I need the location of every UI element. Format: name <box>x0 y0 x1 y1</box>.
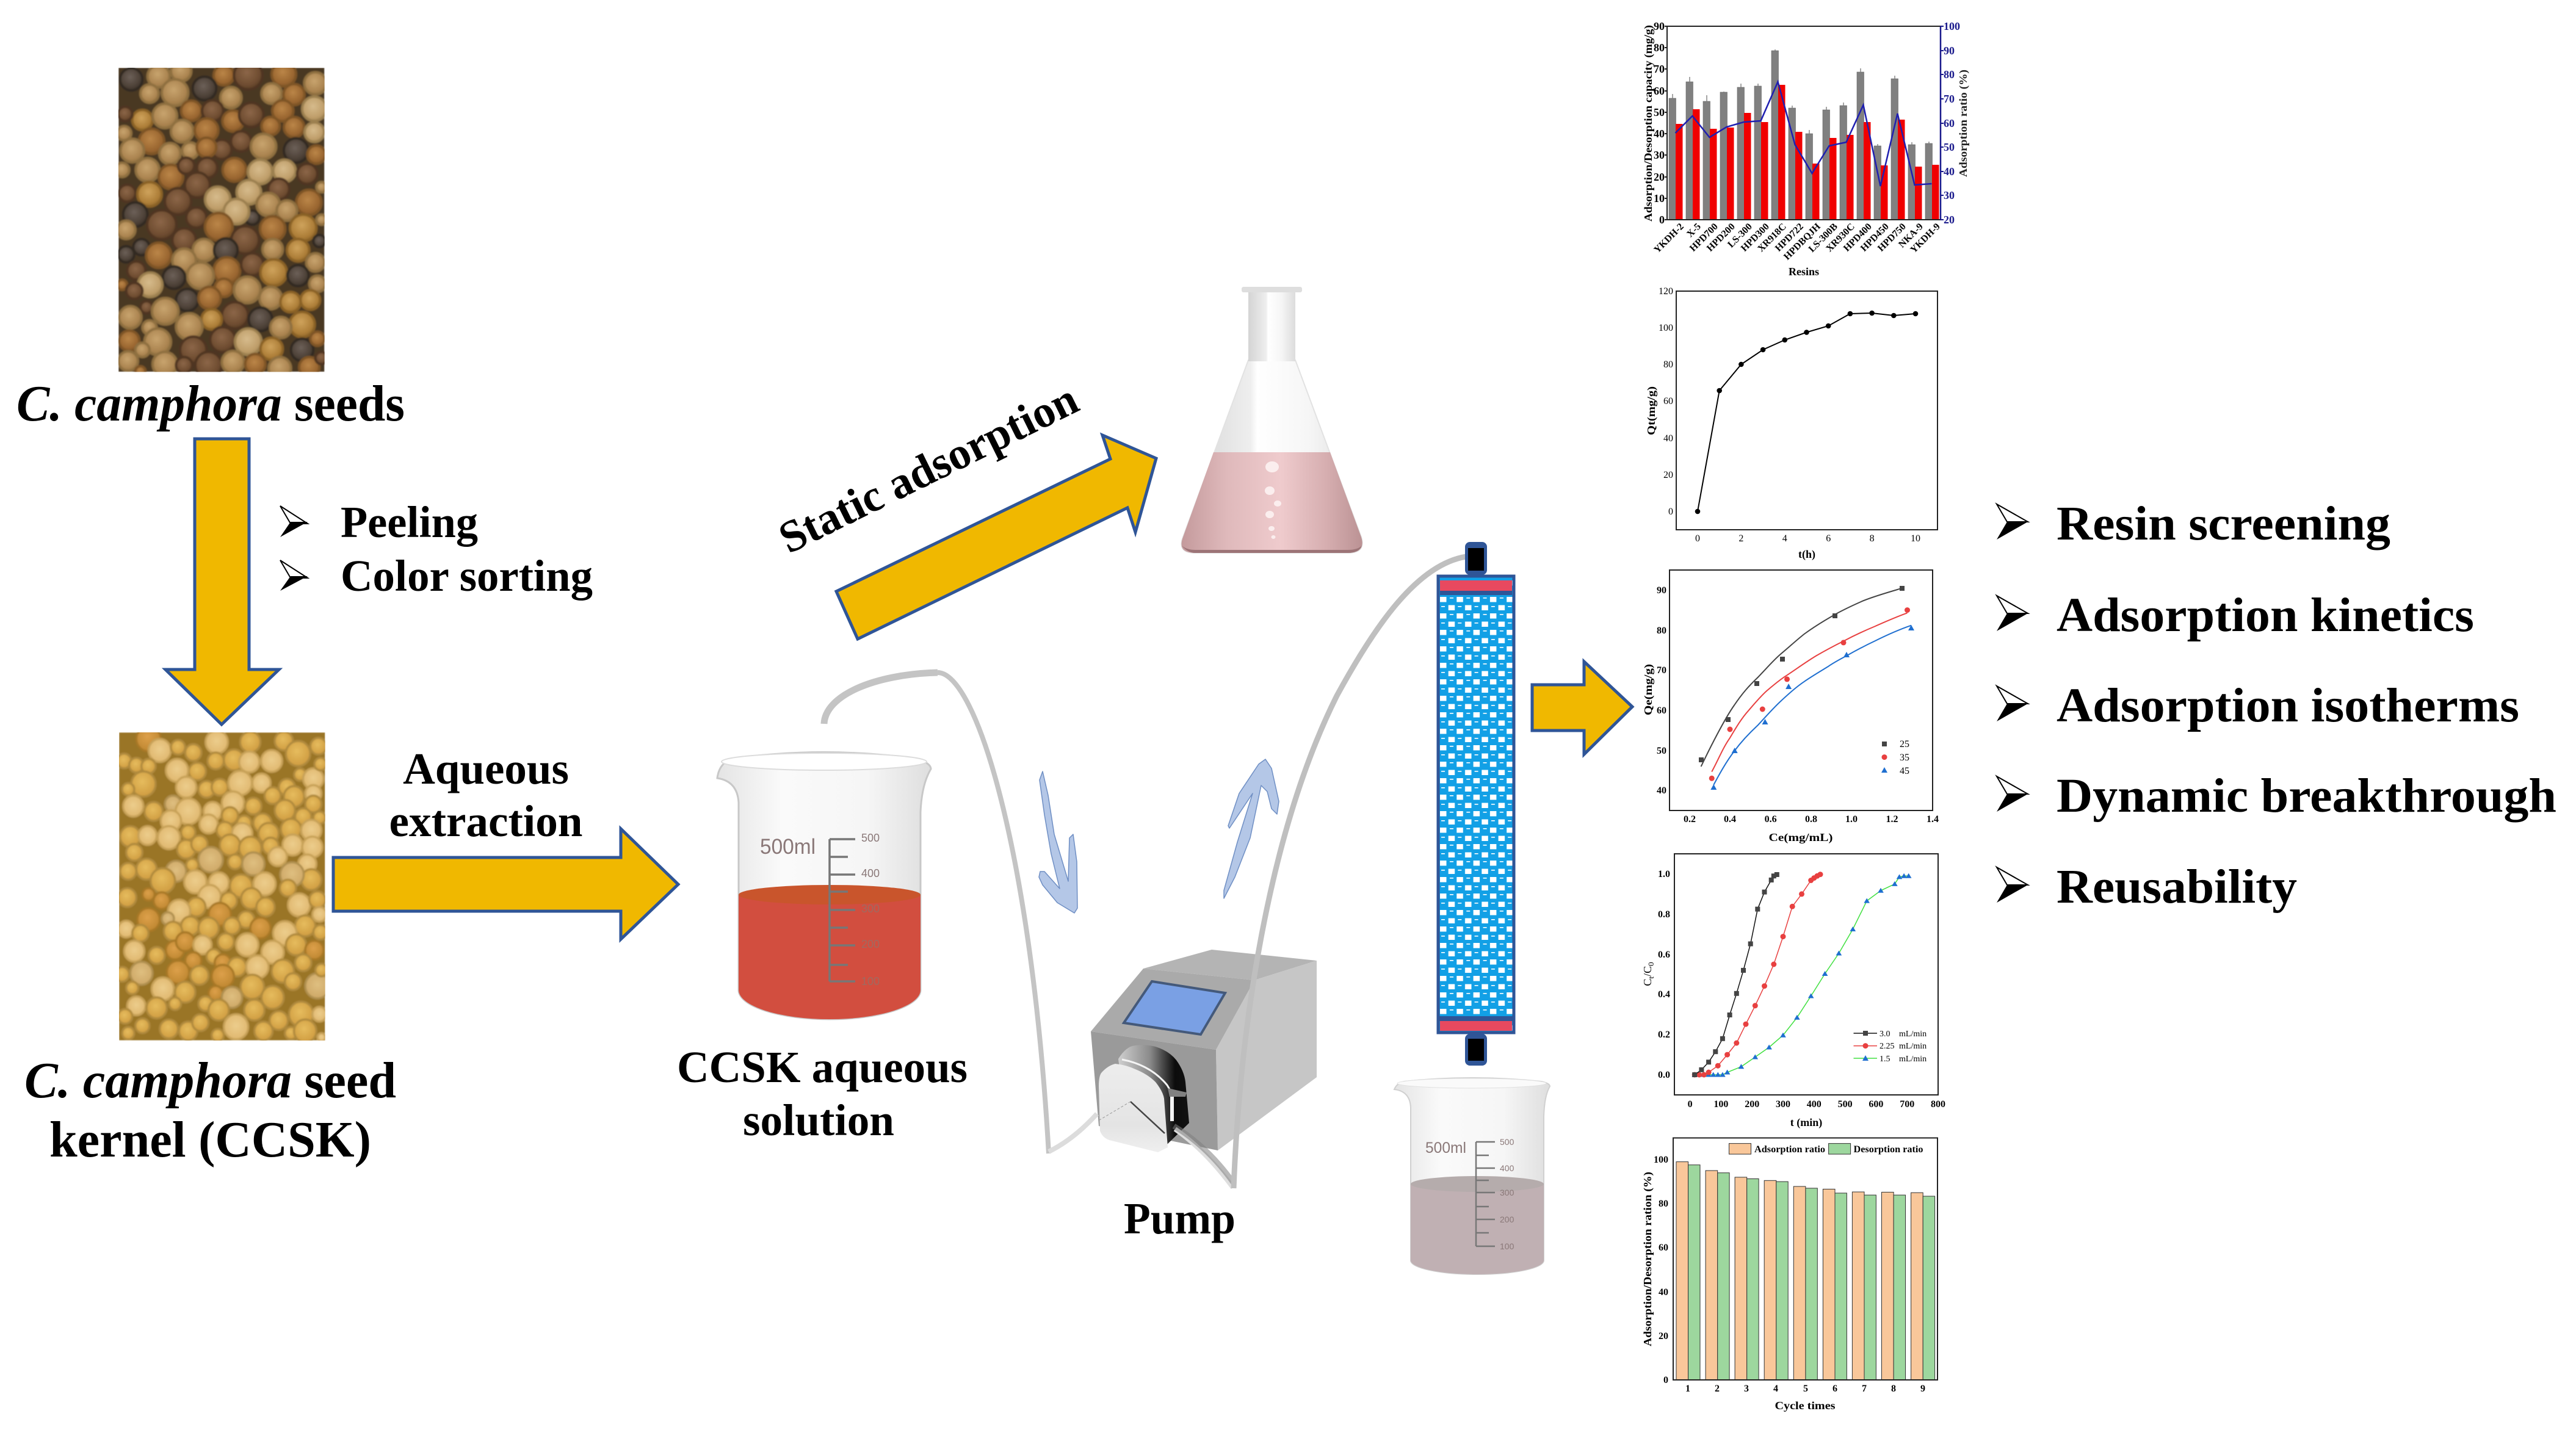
list: evaluation outcomes <box>1997 497 2556 914</box>
resin names: YKDH-9 <box>1908 222 1942 255</box>
label: Aqueous extraction: Aqueous <box>403 744 569 793</box>
beaker: CCSK aqueous solution: 500 <box>861 832 880 844</box>
column: resin packed column <box>1437 542 1515 1066</box>
chart: adsorption isotherms: 80 <box>1657 626 1666 636</box>
right axis labels: 70 <box>1944 93 1955 105</box>
right axis labels: 90 <box>1944 45 1955 57</box>
chart: reusability bars: 60 <box>1659 1243 1668 1253</box>
chart: adsorption kinetics <box>1645 286 1937 561</box>
chart: reusability bars: 40 <box>1659 1287 1668 1298</box>
chart: adsorption isotherms: 70 <box>1657 665 1666 676</box>
chart: reusability bars: Cycle times <box>1775 1399 1835 1412</box>
right axis labels: 30 <box>1944 189 1955 201</box>
beaker: CCSK aqueous solution: 400 <box>861 867 880 879</box>
label: Static adsorption: Static adsorption <box>771 374 1086 563</box>
chart: reusability bars: 20 <box>1659 1331 1668 1341</box>
label: C. camphora seed kernel (CCSK): kernel (CCSK) <box>49 1111 371 1168</box>
beaker: collected effluent: 100 <box>1500 1241 1514 1251</box>
chart: dynamic breakthrough <box>1641 854 1945 1129</box>
left axis labels: 0 <box>1659 214 1665 226</box>
resin names: HPD700 <box>1688 222 1720 254</box>
beaker: CCSK aqueous solution: 500ml <box>760 835 816 859</box>
chart: reusability bars: 2 <box>1715 1384 1720 1394</box>
arrow: flow toward pump <box>1039 771 1077 913</box>
chart: adsorption kinetics: 10 <box>1911 533 1920 544</box>
flask: Erlenmeyer with solution <box>1182 287 1362 553</box>
resin names: HPD750 <box>1876 222 1908 254</box>
arrow: static adsorption <box>836 435 1156 639</box>
left axis labels: 40 <box>1654 128 1665 140</box>
chart: dynamic breakthrough: 600 <box>1869 1099 1883 1110</box>
beaker: collected effluent <box>1394 1078 1550 1274</box>
chart: reusability bars <box>1641 1138 1937 1412</box>
photo: C. camphora seeds <box>115 61 328 380</box>
item: Reusability: Reusability <box>2057 861 2297 914</box>
bars: desorption ratio <box>1688 1165 1935 1380</box>
chart: adsorption kinetics: 40 <box>1663 433 1673 444</box>
chart: reusability bars: 5 <box>1803 1384 1808 1394</box>
left axis labels: 10 <box>1654 192 1665 204</box>
label: Aqueous extraction: extraction <box>389 796 582 846</box>
item: Adsorption isotherms: Adsorption isotherms <box>2057 679 2519 732</box>
legend: flow rates <box>1853 1030 1927 1064</box>
label: CCSK aqueous solution <box>677 1042 968 1145</box>
chart: adsorption isotherms: 0.8 <box>1805 814 1817 825</box>
resin names: XR918C <box>1756 222 1789 254</box>
chart: dynamic breakthrough: 0.8 <box>1658 909 1670 920</box>
item: Resin screening: Resin screening <box>2057 497 2390 550</box>
list: pre-treatment steps <box>280 497 593 601</box>
series 45 <box>1710 625 1914 790</box>
chart: adsorption kinetics: 2 <box>1738 533 1743 544</box>
legend: flow rates: 1.5 <box>1880 1055 1890 1064</box>
chart: adsorption kinetics: 6 <box>1826 533 1831 544</box>
chart: adsorption kinetics: 120 <box>1659 286 1673 297</box>
legend: flow rates: mL/min <box>1899 1055 1927 1064</box>
beaker: CCSK aqueous solution <box>717 752 931 1019</box>
photo: C. camphora seed kernels <box>115 726 330 1042</box>
bars: desorption capacity <box>1676 85 1939 220</box>
chart: reusability bars: 80 <box>1659 1199 1668 1209</box>
chart: dynamic breakthrough: 300 <box>1776 1099 1790 1110</box>
chart: dynamic breakthrough: 0.0 <box>1658 1070 1670 1080</box>
chart: adsorption kinetics: 0 <box>1668 507 1673 517</box>
legend: temperature <box>1881 739 1909 776</box>
chart: adsorption isotherms: 90 <box>1657 585 1666 596</box>
chart: adsorption isotherms: Qe(mg/g) <box>1642 664 1655 715</box>
chart: resin screening bars <box>1642 20 1970 278</box>
left axis labels: 90 <box>1654 20 1665 32</box>
resin names: HPD450 <box>1859 222 1891 254</box>
chart: reusability bars: 6 <box>1833 1384 1837 1394</box>
label: CCSK aqueous solution: solution <box>743 1096 894 1145</box>
resin names: LS-300 <box>1726 222 1754 250</box>
chart: dynamic breakthrough: t <box>1646 976 1655 979</box>
legend: temperature: 35 <box>1900 753 1909 763</box>
line: adsorption ratio <box>1675 82 1931 186</box>
chart: reusability bars: 8 <box>1891 1384 1896 1394</box>
chart: resin screening bars: Resins <box>1789 265 1819 278</box>
chart: reusability bars: 9 <box>1920 1384 1925 1394</box>
chart: resin screening bars: Adsorption/Desorption capacity (mg/g) <box>1642 25 1655 222</box>
chart: dynamic breakthrough: 700 <box>1900 1099 1914 1110</box>
chart: adsorption kinetics: 20 <box>1663 470 1673 480</box>
legend: temperature: 45 <box>1900 766 1909 776</box>
beaker: collected effluent: 300 <box>1500 1188 1514 1197</box>
chart: dynamic breakthrough: 1.0 <box>1658 869 1670 879</box>
beaker: collected effluent: 500 <box>1500 1137 1514 1147</box>
legend: flow rates: mL/min <box>1899 1042 1927 1051</box>
chart: adsorption isotherms: 50 <box>1657 746 1666 756</box>
resin names: NKA-9 <box>1897 222 1925 250</box>
chart: adsorption isotherms: 60 <box>1657 706 1666 716</box>
item: Dynamic breakthrough: Dynamic breakthrough <box>2057 770 2556 823</box>
right axis labels: 50 <box>1944 141 1955 153</box>
legend: ratios <box>1729 1144 1923 1155</box>
list: pre-treatment steps: Color sorting <box>341 551 593 601</box>
label: C. camphora seeds: C. camphora seeds <box>16 375 405 432</box>
right axis labels: 100 <box>1944 20 1960 32</box>
right axis labels <box>1944 20 1960 226</box>
chart: adsorption isotherms: 1.4 <box>1927 814 1939 825</box>
left axis labels: 30 <box>1654 149 1665 161</box>
chart: dynamic breakthrough: 0.4 <box>1658 989 1670 1000</box>
bars: adsorption ratio <box>1676 1162 1923 1380</box>
chart: dynamic breakthrough: 500 <box>1838 1099 1853 1110</box>
beaker: collected effluent: 500ml <box>1425 1139 1466 1157</box>
series 35 <box>1709 607 1910 781</box>
chart: dynamic breakthrough: C <box>1641 979 1654 986</box>
chart: reusability bars: 0 <box>1663 1375 1668 1385</box>
chart: reusability bars: 1 <box>1685 1384 1690 1394</box>
resin names <box>1652 221 1942 262</box>
chart: resin screening bars: Adsorption ratio (%) <box>1957 70 1970 177</box>
chart: adsorption kinetics: 100 <box>1659 323 1673 333</box>
chart: adsorption kinetics: 8 <box>1870 533 1875 544</box>
series 25 <box>1699 586 1905 762</box>
chart: adsorption isotherms <box>1642 570 1939 844</box>
chart: dynamic breakthrough: 0 <box>1646 962 1655 966</box>
chart: dynamic breakthrough: 0.2 <box>1658 1030 1670 1040</box>
chart: adsorption isotherms: 0.2 <box>1684 814 1696 825</box>
label: Pump: Pump <box>1124 1194 1236 1243</box>
arrow: column to analysis <box>1532 662 1632 754</box>
chart: adsorption kinetics: 60 <box>1663 396 1673 406</box>
chart: dynamic breakthrough: 0.6 <box>1658 950 1670 960</box>
chart: adsorption kinetics: 4 <box>1782 533 1787 544</box>
chart: adsorption kinetics: 80 <box>1663 359 1673 370</box>
legend: ratios: Adsorption ratio <box>1754 1144 1825 1155</box>
left axis labels: 70 <box>1654 63 1665 75</box>
legend: flow rates: 3.0 <box>1880 1030 1890 1039</box>
right axis labels: 80 <box>1944 68 1955 81</box>
label: C. camphora seed kernel (CCSK) <box>24 1052 396 1168</box>
resin names: YKDH-2 <box>1652 222 1686 255</box>
beaker: CCSK aqueous solution: 100 <box>861 975 880 987</box>
legend: ratios: Desorption ratio <box>1853 1144 1923 1155</box>
chart: dynamic breakthrough: 800 <box>1931 1099 1945 1110</box>
chart: adsorption kinetics: t(h) <box>1798 548 1815 561</box>
chart: adsorption isotherms: 0.4 <box>1724 814 1736 825</box>
chart: dynamic breakthrough: 100 <box>1713 1099 1728 1110</box>
chart: reusability bars: 100 <box>1654 1155 1668 1165</box>
beaker: CCSK aqueous solution: 200 <box>861 938 880 950</box>
label: C. camphora seed kernel (CCSK): C. camphora seed <box>24 1052 396 1109</box>
arrow: flow toward column <box>1224 759 1279 898</box>
chart: adsorption isotherms: 0.6 <box>1765 814 1777 825</box>
pump: peristaltic pump <box>1091 950 1317 1152</box>
right axis labels: 60 <box>1944 117 1955 129</box>
resin names: LS-300B <box>1807 222 1840 254</box>
resin names: HPD200 <box>1705 222 1737 254</box>
beaker: CCSK aqueous solution: 300 <box>861 903 880 915</box>
bars: adsorption capacity <box>1669 51 1933 220</box>
label: Aqueous extraction <box>389 744 582 846</box>
chart: dynamic breakthrough: /C <box>1641 966 1654 976</box>
beaker: collected effluent: 200 <box>1500 1215 1514 1224</box>
chart: reusability bars: 3 <box>1744 1384 1749 1394</box>
chart: reusability bars: 4 <box>1773 1384 1778 1394</box>
resin names: HPD400 <box>1842 222 1874 254</box>
tube: beaker to pump <box>824 673 1097 1153</box>
chart: adsorption kinetics: Qt(mg/g) <box>1645 386 1658 435</box>
right axis labels: 20 <box>1944 214 1955 226</box>
tube: pump to column <box>1174 557 1466 1188</box>
chart: adsorption kinetics: 0 <box>1695 533 1700 544</box>
resin names: HPD722 <box>1773 222 1806 254</box>
right axis labels: 40 <box>1944 165 1955 178</box>
left axis labels: 50 <box>1654 106 1665 118</box>
left axis labels <box>1654 20 1665 226</box>
resin names: HPD300 <box>1739 222 1771 254</box>
chart: dynamic breakthrough: t (min) <box>1790 1116 1822 1129</box>
left axis labels: 20 <box>1654 171 1665 183</box>
chart: dynamic breakthrough: 200 <box>1745 1099 1759 1110</box>
beaker: collected effluent: 400 <box>1500 1163 1514 1173</box>
chart: dynamic breakthrough: 0 <box>1688 1099 1693 1110</box>
arrow: aqueous extraction <box>333 829 678 939</box>
chart: adsorption isotherms: 1.0 <box>1845 814 1858 825</box>
legend: flow rates: mL/min <box>1899 1030 1927 1039</box>
resin names: HPDBQJH <box>1782 221 1823 262</box>
chart: adsorption isotherms: Ce(mg/mL) <box>1769 831 1833 844</box>
resin names: XR930C <box>1824 222 1857 254</box>
left axis labels: 60 <box>1654 85 1665 97</box>
left axis labels: 80 <box>1654 42 1665 54</box>
chart: adsorption isotherms: 40 <box>1657 785 1666 796</box>
chart: dynamic breakthrough: 400 <box>1807 1099 1822 1110</box>
resin names: X-5 <box>1685 222 1703 239</box>
label: CCSK aqueous solution: CCSK aqueous <box>677 1042 968 1092</box>
arrow: seeds to kernels <box>165 439 279 724</box>
legend: temperature: 25 <box>1900 739 1909 749</box>
item: Adsorption kinetics: Adsorption kinetics <box>2057 589 2474 642</box>
chart: reusability bars: 7 <box>1862 1384 1867 1394</box>
legend: flow rates: 2.25 <box>1880 1042 1895 1051</box>
list: pre-treatment steps: Peeling <box>341 497 478 547</box>
chart: adsorption isotherms: 1.2 <box>1886 814 1898 825</box>
chart: reusability bars: Adsorption/Desorption ration (%) <box>1641 1172 1654 1346</box>
